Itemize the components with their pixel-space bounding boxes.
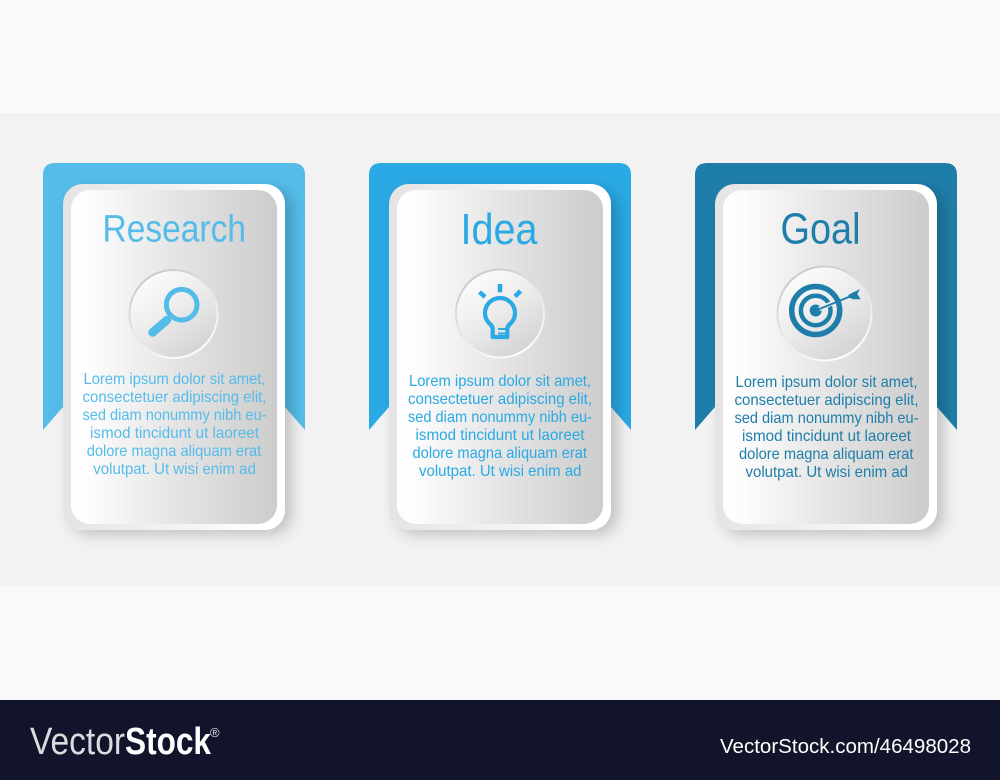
icon disc: idea: [456, 270, 544, 358]
body text: research: sed diam nonummy nibh eu-: [82, 407, 266, 424]
ribbon: research: [43, 163, 305, 430]
icon: light bulb: [480, 284, 520, 337]
body text: goal: dolore magna aliquam erat: [739, 446, 914, 463]
lower band: [0, 586, 1000, 700]
body text: idea: consectetuer adipiscing elit,: [408, 391, 592, 408]
body text: idea: dolore magna aliquam erat: [412, 445, 588, 462]
icon: magnifying glass: [152, 289, 197, 332]
body text: idea: [408, 373, 592, 480]
body text: idea: volutpat. Ut wisi enim ad: [419, 463, 582, 480]
body text: research: dolore magna aliquam erat: [87, 443, 262, 460]
body text: idea: Lorem ipsum dolor sit amet,: [409, 373, 591, 390]
body text: research: consectetuer adipiscing elit,: [82, 389, 266, 406]
logo: VectorStock: Vector: [30, 721, 125, 763]
card: idea: [389, 184, 611, 530]
image id text: VectorStock.com/46498028: [720, 736, 971, 758]
logo: VectorStock: [30, 721, 220, 763]
icon disc: research: [130, 270, 218, 358]
card: research: [63, 184, 285, 530]
body text: idea: sed diam nonummy nibh eu-: [408, 409, 592, 426]
panel: idea: [369, 163, 631, 530]
logo: VectorStock: ®: [210, 725, 220, 740]
icon: target with arrow: [792, 286, 861, 334]
heading: idea: Idea: [460, 205, 538, 254]
body text: goal: consectetuer adipiscing elit,: [734, 392, 918, 409]
body text: goal: ismod tincidunt ut laoreet: [742, 428, 912, 445]
body text: goal: sed diam nonummy nibh eu-: [734, 410, 918, 427]
body text: goal: [734, 374, 918, 481]
body text: research: ismod tincidunt ut laoreet: [90, 425, 260, 442]
body text: goal: Lorem ipsum dolor sit amet,: [736, 374, 918, 391]
icon disc: goal: [778, 266, 872, 360]
panel: research: [43, 163, 305, 530]
body text: research: [82, 371, 266, 478]
middle background band: [0, 113, 1000, 586]
body text: idea: ismod tincidunt ut laoreet: [416, 427, 585, 444]
ribbon: goal: [695, 163, 957, 430]
heading: research: Research: [102, 208, 246, 250]
panel: goal: [695, 163, 957, 530]
logo: VectorStock: Stock: [125, 721, 212, 763]
footer bar: [0, 700, 1000, 780]
ribbon: idea: [369, 163, 631, 430]
body text: goal: volutpat. Ut wisi enim ad: [746, 464, 908, 481]
heading: goal: Goal: [780, 204, 860, 254]
body text: research: volutpat. Ut wisi enim ad: [93, 461, 256, 478]
body text: research: Lorem ipsum dolor sit amet,: [84, 371, 266, 388]
card: goal: [715, 184, 937, 530]
top band: [0, 0, 1000, 113]
